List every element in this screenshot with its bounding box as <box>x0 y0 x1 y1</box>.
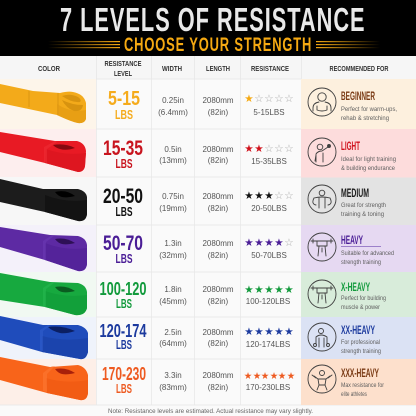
width column: (19mm) <box>159 204 187 213</box>
length column: (82in) <box>208 156 229 165</box>
panel: x-heavy: X-HEAVY <box>341 282 370 294</box>
star ratings: ★ <box>278 371 286 382</box>
resistance level values: 120-174 <box>100 320 147 341</box>
star ratings: ☆ <box>264 143 274 155</box>
star ratings: ☆ <box>284 190 294 202</box>
length column: 2080mm <box>202 239 234 248</box>
star ratings: ☆ <box>264 93 274 105</box>
panel: beginner: rehab & stretching <box>341 115 389 122</box>
star ratings: ★ <box>261 371 269 382</box>
band: orange <box>0 357 88 400</box>
width column: (83mm) <box>159 383 187 392</box>
star ratings: 5-15LBS <box>253 108 285 117</box>
star ratings: ★ <box>244 326 254 338</box>
star ratings: ☆ <box>284 93 294 105</box>
icon: person with bands <box>308 185 336 213</box>
panel: xxx-heavy: XXX-HEAVY <box>341 368 379 380</box>
star ratings: ★ <box>244 93 254 105</box>
star ratings: ★ <box>244 143 254 155</box>
resistance level values <box>100 88 147 396</box>
star ratings: ★ <box>254 143 264 155</box>
title: 7 LEVELS OF RESISTANCE <box>60 1 366 38</box>
width column: (64mm) <box>159 339 187 348</box>
star ratings: ★ <box>270 371 278 382</box>
star ratings: ★ <box>264 326 274 338</box>
icon: strongman <box>308 365 336 393</box>
panel: x-heavy: muscle & power <box>341 304 381 311</box>
resistance level values: LBS <box>116 338 132 352</box>
panel: medium: training & toning <box>341 211 384 218</box>
resistance level values: LBS <box>116 252 132 266</box>
length column: 2080mm <box>202 96 234 105</box>
resistance level values: LBS <box>116 382 132 396</box>
panel: x-heavy: Perfect for building <box>341 295 386 302</box>
resistance level values: LBS <box>116 297 132 311</box>
star ratings: ★ <box>274 237 284 249</box>
panel: xxx-heavy: Max resistance for <box>341 382 385 389</box>
length column: 2080mm <box>202 285 234 294</box>
star ratings: ☆ <box>284 143 294 155</box>
table header row: RESISTANCE <box>104 59 142 68</box>
panel: xx-heavy: XX-HEAVY <box>341 325 375 337</box>
resistance level values: 100-120 <box>100 278 146 299</box>
resistance level values: 20-50 <box>103 185 143 208</box>
width column: (6.4mm) <box>158 108 188 117</box>
width column: 2.5in <box>164 328 182 337</box>
length column: 2080mm <box>202 371 234 380</box>
panel: light: & building endurance <box>341 165 395 172</box>
star ratings: ★ <box>254 326 264 338</box>
band: red <box>0 132 86 172</box>
length column: (82in) <box>208 251 229 260</box>
panel: x-heavy <box>301 272 416 317</box>
footnote: Note: Resistance levels are estimated. Actual resistance may vary slightly. <box>108 408 313 415</box>
panel: medium <box>301 178 416 225</box>
length column: (82in) <box>208 339 229 348</box>
star ratings: ★ <box>287 371 295 382</box>
star ratings: ★ <box>254 284 264 296</box>
star ratings: 20-50LBS <box>251 204 287 213</box>
length column: 2080mm <box>202 192 234 201</box>
resistance level values: LBS <box>116 157 132 171</box>
band: blue <box>0 316 88 359</box>
star ratings: 50-70LBS <box>251 251 287 260</box>
table header row: LENGTH <box>206 64 230 73</box>
subtitle flourish right <box>316 41 380 48</box>
width column: 1.3in <box>164 239 182 248</box>
star ratings: ★ <box>253 371 261 382</box>
resistance level values: LBS <box>115 108 133 122</box>
table header row: COLOR <box>38 64 60 73</box>
resistance level values: 170-230 <box>102 363 146 384</box>
star ratings: ★ <box>244 237 254 249</box>
band: purple <box>0 227 87 271</box>
star ratings: ★ <box>274 326 284 338</box>
width column: 0.25in <box>162 96 184 105</box>
band: green <box>0 273 87 315</box>
star ratings: 15-35LBS <box>251 157 287 166</box>
star ratings: ★ <box>264 237 274 249</box>
star ratings: ☆ <box>284 237 294 249</box>
width column: 3.3in <box>164 371 182 380</box>
color column tinted rows <box>0 79 96 405</box>
panel: heavy <box>301 225 416 272</box>
panel: beginner <box>301 79 416 129</box>
panel: light: LIGHT <box>341 141 360 153</box>
length column: (82in) <box>208 108 229 117</box>
star ratings: ☆ <box>274 190 284 202</box>
panel: medium: Great for strength <box>341 202 386 209</box>
star ratings: 100-120LBS <box>246 297 290 306</box>
table header row: RESISTANCE <box>251 64 289 73</box>
resistance level values: 50-70 <box>103 232 143 255</box>
resistance level values: LBS <box>116 205 132 219</box>
length column: 2080mm <box>202 328 234 337</box>
heading underline <box>341 245 381 248</box>
icon: person with dumbbells <box>308 323 336 351</box>
star ratings: ☆ <box>274 93 284 105</box>
icon: person with light weight <box>308 138 336 166</box>
header banner <box>0 0 416 56</box>
star ratings: ★ <box>254 190 264 202</box>
star ratings: ★ <box>244 371 252 382</box>
star ratings: ★ <box>284 284 294 296</box>
panel: xxx-heavy: elite athletes <box>341 391 367 398</box>
panel: beginner: BEGINNER <box>341 91 375 103</box>
width column: (13mm) <box>159 156 187 165</box>
star ratings: 170-230LBS <box>246 383 290 392</box>
resistance level values: 15-35 <box>103 137 143 160</box>
length column: (82in) <box>208 204 229 213</box>
table header row: WIDTH <box>162 64 182 73</box>
star ratings: ★ <box>264 284 274 296</box>
length column: (82in) <box>208 383 229 392</box>
panel: medium: MEDIUM <box>341 188 369 200</box>
star ratings <box>244 93 295 392</box>
star ratings: ★ <box>274 284 284 296</box>
subtitle flourish left <box>48 41 120 48</box>
star ratings: ☆ <box>254 93 264 105</box>
panel: xx-heavy: For professional <box>341 339 380 346</box>
star ratings: ☆ <box>274 143 284 155</box>
subtitle: CHOOSE YOUR STRENGTH <box>124 35 312 56</box>
width column: 0.75in <box>162 192 184 201</box>
icon: person bust <box>308 88 336 116</box>
width column: 1.8in <box>164 285 182 294</box>
width column <box>158 96 188 392</box>
table header row: LEVEL <box>114 69 132 78</box>
width column: (45mm) <box>159 297 187 306</box>
length column: (82in) <box>208 297 229 306</box>
width column: 0.5in <box>164 145 182 154</box>
star ratings: ★ <box>264 190 274 202</box>
panel: light <box>301 129 416 178</box>
table header row: RECOMMENDED FOR <box>330 64 389 73</box>
panel: beginner: Perfect for warm-ups, <box>341 106 397 113</box>
panel: xxx-heavy <box>301 359 416 405</box>
panel: xx-heavy: strength training <box>341 348 381 355</box>
width column: (32mm) <box>159 251 187 260</box>
panel: heavy: Suitable for advanced <box>341 250 394 257</box>
star ratings: ★ <box>254 237 264 249</box>
resistance level values: 5-15 <box>108 88 140 110</box>
star ratings: ★ <box>244 284 254 296</box>
icon: barbell lift <box>308 280 336 308</box>
star ratings: 120-174LBS <box>246 340 290 349</box>
table header row <box>0 56 416 79</box>
panel: heavy: HEAVY <box>341 235 363 247</box>
icon: overhead press <box>308 233 336 261</box>
star ratings: ★ <box>284 326 294 338</box>
length column: 2080mm <box>202 145 234 154</box>
star ratings: ★ <box>244 190 254 202</box>
panel: xx-heavy <box>301 317 416 359</box>
band: yellow <box>0 84 86 123</box>
length column <box>202 96 234 392</box>
panel: heavy: strength training <box>341 259 381 266</box>
band: black <box>0 179 87 221</box>
panel: light: Ideal for light training <box>341 156 396 163</box>
